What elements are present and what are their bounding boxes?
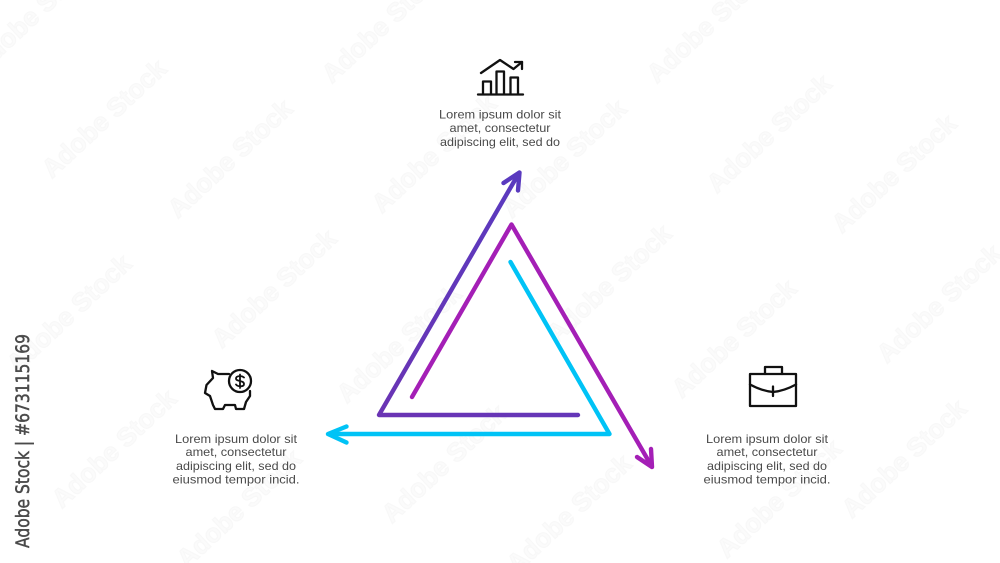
text: Adobe Stock xyxy=(701,68,838,199)
arrow: magenta, pointing down right xyxy=(412,224,652,467)
text block: top: Lorem ipsum dolor sit xyxy=(439,108,562,122)
text block: top: amet, consectetur xyxy=(450,121,550,135)
text: Adobe Stock xyxy=(366,88,503,219)
triangle diagram with three arrows xyxy=(328,172,652,467)
text block: right: eiusmod tempor incid. xyxy=(704,472,830,486)
icon: piggy bank with dollar coin xyxy=(205,370,251,409)
text block: left: Lorem ipsum dolor sit xyxy=(175,432,298,446)
text block: right xyxy=(704,432,830,486)
text block: left xyxy=(172,432,300,486)
panel: right item xyxy=(704,367,830,486)
text: Adobe Stock xyxy=(711,433,848,563)
icon: briefcase xyxy=(750,367,796,406)
text block: right: adipiscing elit, sed do xyxy=(707,459,827,473)
text: Adobe Stock xyxy=(666,273,803,404)
text block: left: amet, consectetur xyxy=(186,445,286,459)
watermark id text: Adobe Stock | #673115169 xyxy=(12,334,34,548)
text: Adobe Stock xyxy=(376,398,513,529)
text block: right: Lorem ipsum dolor sit xyxy=(706,432,829,446)
text block: right: amet, consectetur xyxy=(716,445,818,459)
arrow: cyan, pointing left xyxy=(328,262,610,442)
text: Adobe Stock xyxy=(206,223,343,354)
text block: left: eiusmod tempor incid. xyxy=(172,472,300,486)
text: Adobe Stock xyxy=(46,383,183,514)
text: Adobe Stock xyxy=(496,93,633,224)
text: Adobe Stock xyxy=(826,108,963,239)
text: Adobe Stock xyxy=(836,393,973,524)
text block: top xyxy=(439,108,562,149)
text: Adobe Stock xyxy=(541,218,678,349)
text: Adobe Stock xyxy=(331,278,468,409)
panel: top item xyxy=(439,60,562,149)
text: Adobe Stock xyxy=(1,248,138,379)
text block: top: adipiscing elit, sed do xyxy=(440,135,560,149)
icon: growth bar chart xyxy=(478,60,523,94)
text block: left: adipiscing elit, sed do xyxy=(176,459,296,473)
arrow: purple, pointing up right xyxy=(379,172,578,415)
panel: left item xyxy=(172,370,300,486)
text: Adobe Stock xyxy=(36,53,173,184)
text: Adobe Stock xyxy=(162,93,299,224)
